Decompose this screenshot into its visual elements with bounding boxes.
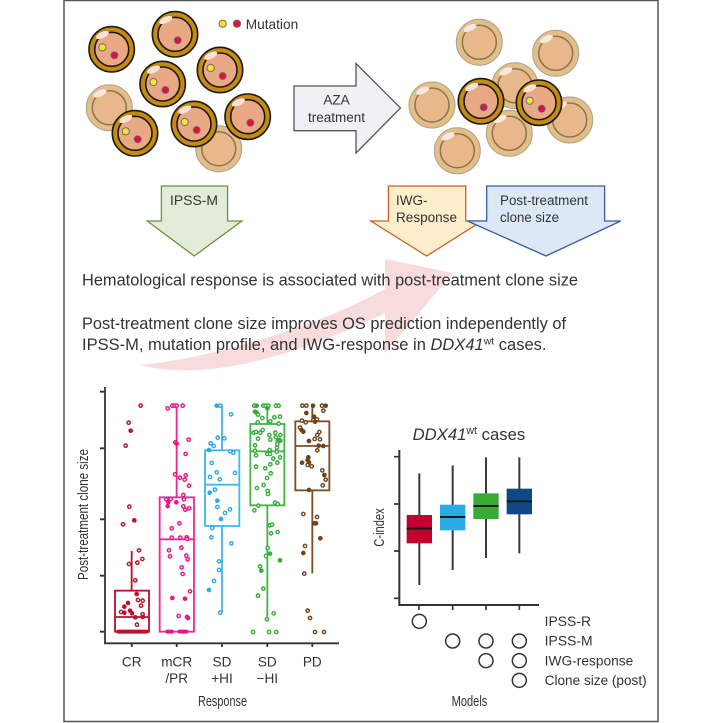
- text: OS prediction: [82, 315, 566, 354]
- arrow: IPSS-M: [147, 186, 242, 256]
- swoosh arrow: [140, 259, 453, 370]
- arrow: AZA treatment: [294, 64, 400, 153]
- x-axis category labels: [122, 654, 322, 686]
- model row labels: IWG-response: [545, 653, 633, 668]
- box plot: CR: [115, 404, 149, 632]
- box plot: PD: [295, 403, 329, 634]
- arrow: IWG-Response: IWG-: [396, 193, 428, 208]
- x-axis category labels: SD: [258, 654, 277, 670]
- pre-treatment cell cluster: [86, 12, 270, 172]
- arrow: AZA treatment: AZA: [323, 92, 350, 108]
- box: full model: [507, 457, 532, 553]
- y-axis label: Post-treatment clone size: [75, 449, 92, 580]
- box: IPSS-M + IWG model: [473, 457, 499, 558]
- x-axis category labels: CR: [122, 654, 142, 670]
- x-axis title: Models: [452, 693, 487, 710]
- x-axis category labels: −HI: [257, 671, 278, 686]
- model row labels: Clone size (post): [545, 673, 647, 688]
- legend: mutation: Mutation: [246, 17, 298, 32]
- arrow: post-treatment clone size: clone size: [500, 210, 559, 225]
- x-axis category labels: SD: [213, 654, 232, 670]
- model membership circles: [412, 614, 526, 687]
- arrow: IPSS-M: IPSS-M: [170, 192, 218, 208]
- model row labels: IPSS-R: [545, 614, 591, 629]
- box plot: SD-HI: [250, 403, 284, 634]
- post-treatment cell cluster: [409, 19, 593, 174]
- box plot: mCR/PR: [160, 404, 194, 632]
- chart title: wt: [465, 425, 477, 437]
- text: response association: Hematological response is associated with post-treatment clone size: [82, 272, 578, 290]
- x-axis category labels: /PR: [165, 671, 188, 686]
- chart axes: [100, 387, 339, 647]
- arrow: IWG-Response: [371, 186, 482, 256]
- box: IPSS-M model: [440, 465, 465, 570]
- box: IPSS-R model: [407, 473, 432, 585]
- right chart: C-index by model: [371, 425, 647, 710]
- model row labels: IPSS-M: [545, 634, 593, 649]
- left chart: clone size by response: [75, 387, 339, 710]
- arrow: AZA treatment: treatment: [308, 110, 365, 125]
- x-axis category labels: mCR: [161, 654, 192, 670]
- chart title: cases: [477, 425, 525, 444]
- text: OS prediction: wt: [483, 336, 494, 348]
- x-axis category labels: PD: [303, 654, 322, 670]
- text: OS prediction: cases.: [494, 336, 546, 354]
- y-axis label: C-index: [371, 508, 388, 547]
- chart title: DDX41: [413, 425, 466, 444]
- arrow: post-treatment clone size: Post-treatment: [500, 193, 588, 208]
- x-axis title: Response: [198, 693, 247, 710]
- text: OS prediction: IPSS-M, mutation profile, and IWG-response in DDX41: [82, 336, 484, 354]
- chart axes: [394, 450, 539, 610]
- box plot: SD+HI: [205, 403, 239, 614]
- legend: mutation: [219, 17, 298, 32]
- text: OS prediction: Post-treatment clone size improves OS prediction independently of: [82, 315, 566, 333]
- arrow: IWG-Response: Response: [396, 210, 457, 225]
- x-axis category labels: +HI: [211, 671, 233, 686]
- arrow: post-treatment clone size: [468, 186, 621, 256]
- model row labels: [545, 614, 647, 688]
